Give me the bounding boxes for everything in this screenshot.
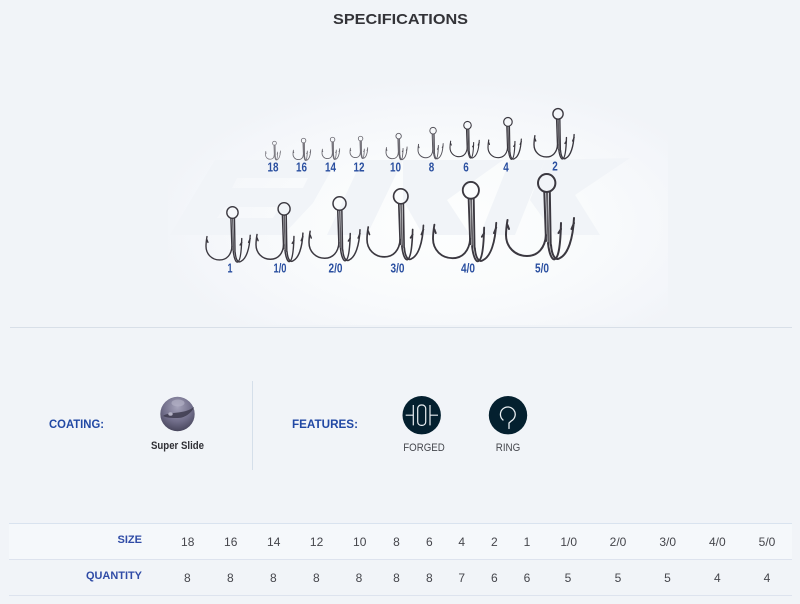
quantity row: QUANTITY: [86, 570, 143, 582]
coating name: Super Slide: [151, 440, 204, 452]
hook size labels: 4: [503, 160, 509, 174]
size row: 4: [458, 535, 465, 549]
hook size labels: 2: [552, 158, 558, 174]
hooks: large row: [206, 174, 574, 262]
quantity row: 8: [184, 571, 191, 585]
size row: 10: [353, 535, 367, 549]
features label: FEATURES:: [292, 417, 358, 431]
quantity row: 6: [491, 571, 498, 585]
hook size labels: 3/0: [390, 260, 404, 276]
quantity row: 5: [664, 571, 671, 585]
hook size labels: 16: [296, 160, 307, 174]
quantity row: 8: [356, 571, 363, 585]
icon: ring: [489, 396, 527, 434]
hook size labels: 8: [429, 160, 434, 174]
quantity row: 6: [524, 571, 531, 585]
brand watermark: [170, 158, 630, 235]
size row: 1/0: [560, 535, 577, 549]
quantity row: [86, 570, 771, 585]
quantity row: 8: [313, 571, 320, 585]
hook size labels: 18: [268, 160, 278, 174]
quantity row: 5: [565, 571, 572, 585]
icon: forged: [402, 396, 441, 434]
hook size labels: 10: [390, 160, 401, 174]
size row: 4/0: [709, 535, 726, 549]
hook chart panel: [168, 73, 668, 325]
size row: 2/0: [610, 535, 627, 549]
hook size labels: 4/0: [461, 260, 475, 276]
quantity row: 8: [393, 571, 400, 585]
hooks: small row: [266, 109, 574, 160]
size row: 18: [181, 535, 195, 549]
size row: 1: [524, 535, 531, 549]
hook size labels: 1/0: [274, 260, 286, 276]
ring label: RING: [496, 442, 520, 454]
title: SPECIFICATIONS: [333, 11, 468, 28]
forged label: FORGED: [403, 442, 445, 454]
hook size labels: 14: [325, 160, 337, 174]
hook size labels: 12: [354, 160, 364, 174]
features panel: [292, 396, 527, 454]
quantity row: 4: [714, 571, 721, 585]
size row: 2: [491, 535, 498, 549]
size row: [118, 534, 776, 549]
panel glow: [168, 73, 668, 325]
size row background: [9, 523, 792, 559]
quantity row: 8: [426, 571, 433, 585]
vertical divider: [252, 381, 253, 470]
section divider: [10, 327, 792, 328]
quantity row: 7: [458, 571, 465, 585]
quantity row: 8: [270, 571, 277, 585]
quantity row: 5: [615, 571, 622, 585]
hook size labels: 1: [228, 260, 232, 276]
size row: 8: [393, 535, 400, 549]
coating label: COATING:: [49, 417, 104, 431]
coating panel: [49, 397, 204, 452]
icon: super slide ball: [160, 397, 195, 431]
quantity row: 4: [764, 571, 771, 585]
hook size labels: 6: [463, 160, 469, 174]
hook size labels: [228, 158, 558, 276]
size row: 3/0: [659, 535, 676, 549]
size row: SIZE: [118, 534, 142, 546]
size row: 5/0: [759, 535, 776, 549]
size row: 12: [310, 535, 324, 549]
quantity row: 8: [227, 571, 234, 585]
size row: 6: [426, 535, 433, 549]
size row: 16: [224, 535, 238, 549]
specifications table: [9, 523, 792, 596]
hook size labels: 2/0: [328, 260, 342, 276]
hook size labels: 5/0: [535, 260, 549, 276]
size row: 14: [267, 535, 281, 549]
